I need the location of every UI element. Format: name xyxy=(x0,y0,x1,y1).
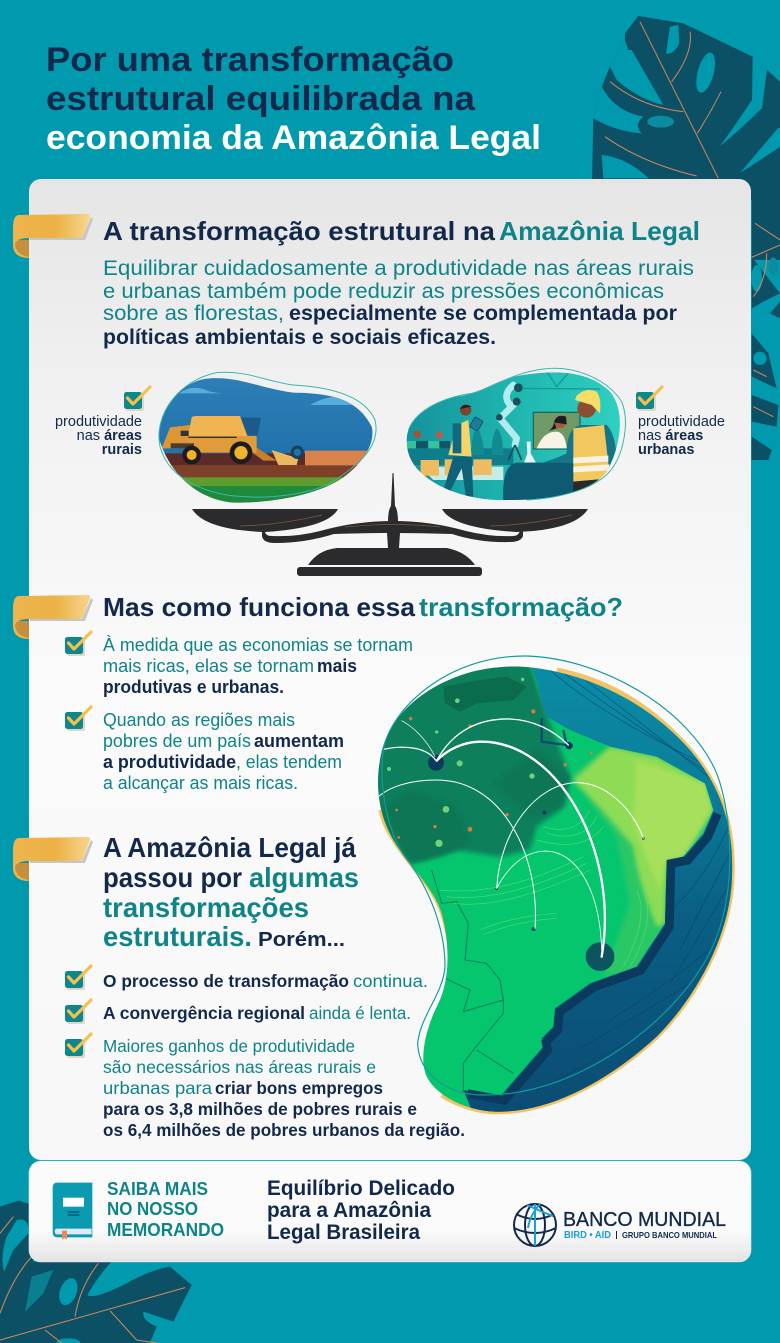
text block: richer economies: À medida que as economias se tornam xyxy=(103,635,413,655)
decorative monstera leaf: bottom left xyxy=(0,1201,192,1343)
heading: how it works xyxy=(103,592,623,622)
text block: intro paragraph: políticas ambientais e sociais eficazes. xyxy=(103,325,496,349)
ribbon: section 1 xyxy=(13,214,93,258)
logo: World Bank: GRUPO BANCO MUNDIAL xyxy=(622,1230,717,1240)
icon: book xyxy=(53,1183,92,1240)
text block: intro paragraph: Equilibrar cuidadosamente a produtividade nas áreas rurais xyxy=(103,256,694,280)
label: urban productivity: urbanas xyxy=(638,442,694,458)
logo: World Bank: BIRD • AID xyxy=(564,1230,611,1241)
title: economia da Amazônia Legal xyxy=(46,119,541,157)
title: estrutural equilibrada na xyxy=(46,80,476,118)
label: urban productivity: produtividade xyxy=(638,414,725,430)
icon: check bullet 5 xyxy=(65,1034,91,1058)
icon: check bullet 1 xyxy=(65,632,91,656)
heading: structural transformation: Amazônia Legal xyxy=(499,216,700,246)
heading: structural transformation xyxy=(103,216,700,246)
heading: legal amazon has undergone transformations: A Amazônia Legal já xyxy=(103,832,356,863)
text block: poorer regions: pobres de um país xyxy=(103,731,251,751)
text block: poorer regions: a produtividade xyxy=(103,752,236,772)
icon: check bullet 3 xyxy=(65,966,91,990)
logo: World Bank: BANCO MUNDIAL xyxy=(563,1209,726,1231)
text block: richer economies: mais xyxy=(317,656,357,676)
text block: richer economies: mais ricas, elas se tornam xyxy=(103,656,314,676)
text block: larger productivity gains: são necessários nas áreas rurais e xyxy=(103,1057,376,1077)
heading: how it works: transformação? xyxy=(419,592,623,622)
text block: intro paragraph: sobre as florestas, xyxy=(103,301,284,325)
label: rural productivity: rurais xyxy=(102,442,142,458)
text block: richer economies: produtivas e urbanas. xyxy=(103,677,284,697)
text block: larger productivity gains: para os 3,8 milhões de pobres rurais e xyxy=(103,1099,417,1119)
text: slow convergence: ainda é lenta. xyxy=(309,1003,411,1023)
illustration: balance scale xyxy=(192,473,588,576)
text block: intro paragraph: especialmente se complementada por xyxy=(289,301,678,325)
label: urban productivity xyxy=(638,414,725,458)
text block: intro paragraph xyxy=(103,256,694,349)
text block: intro paragraph: e urbanas também pode reduzir as pressões econômicas xyxy=(103,279,664,303)
label: rural productivity: produtividade xyxy=(55,414,142,430)
text block: poorer regions: aumentam xyxy=(254,731,344,751)
text block: larger productivity gains: criar bons empregos xyxy=(215,1078,383,1098)
ribbon: section 3 xyxy=(13,837,93,881)
text block: larger productivity gains: urbanas para xyxy=(103,1078,212,1098)
text: learn more: MEMORANDO xyxy=(107,1220,224,1240)
text: memo title xyxy=(267,1177,455,1244)
title: Por uma transformação xyxy=(46,41,454,79)
label: urban productivity: nas áreas xyxy=(638,428,703,444)
text: learn more: NO NOSSO xyxy=(107,1199,198,1219)
text: learn more xyxy=(107,1179,224,1240)
text block: poorer regions: a alcançar as mais ricas. xyxy=(103,773,298,793)
text: memo title: Legal Brasileira xyxy=(267,1221,420,1244)
icon: check urban xyxy=(636,387,662,411)
text block: richer economies xyxy=(103,635,413,697)
text block: poorer regions: Quando as regiões mais xyxy=(103,710,295,730)
text: learn more: SAIBA MAIS xyxy=(107,1179,208,1199)
text block: poorer regions: , elas tendem xyxy=(236,752,342,772)
text block: larger productivity gains xyxy=(103,1036,465,1140)
text: slow convergence: A convergência regional xyxy=(103,1003,305,1023)
heading: legal amazon has undergone transformations: estruturais. xyxy=(103,921,252,952)
label: rural productivity: nas áreas xyxy=(77,428,142,444)
heading: how it works: Mas como funciona essa xyxy=(103,592,416,622)
icon: check bullet 4 xyxy=(65,1000,91,1024)
heading: structural transformation: A transformação estrutural na xyxy=(103,216,496,246)
panel: main content card xyxy=(29,179,751,1160)
ribbon: section 2 xyxy=(13,595,93,639)
heading: legal amazon has undergone transformations: passou por xyxy=(103,862,242,893)
illustration: rural blob with harvester xyxy=(150,370,383,506)
illustration: map of Brazil blob xyxy=(378,655,735,1114)
text: process continues: continua. xyxy=(353,971,428,991)
text: process continues: O processo de transformação xyxy=(103,971,349,991)
text block: poorer regions xyxy=(103,710,344,793)
heading: legal amazon has undergone transformations: transformações xyxy=(103,892,309,923)
illustration: urban blob with factory workers xyxy=(406,368,626,500)
text block: larger productivity gains: Maiores ganhos de produtividade xyxy=(103,1036,355,1056)
heading: legal amazon has undergone transformations: algumas xyxy=(249,862,359,893)
icon: check bullet 2 xyxy=(65,707,91,731)
logo: World Bank xyxy=(514,1204,726,1246)
text block: larger productivity gains: os 6,4 milhões de pobres urbanos da região. xyxy=(103,1120,465,1140)
decorative monstera leaf: top right xyxy=(592,16,780,460)
icon: check rural xyxy=(124,387,150,411)
text: memo title: Equilíbrio Delicado xyxy=(267,1177,455,1200)
label: rural productivity xyxy=(55,414,142,458)
heading: legal amazon has undergone transformations xyxy=(103,832,359,952)
panel: footer card xyxy=(29,1161,751,1262)
heading: legal amazon has undergone transformations: Porém... xyxy=(258,929,345,951)
text: memo title: para a Amazônia xyxy=(267,1199,431,1222)
title xyxy=(46,41,541,157)
text: slow convergence xyxy=(103,1003,411,1023)
